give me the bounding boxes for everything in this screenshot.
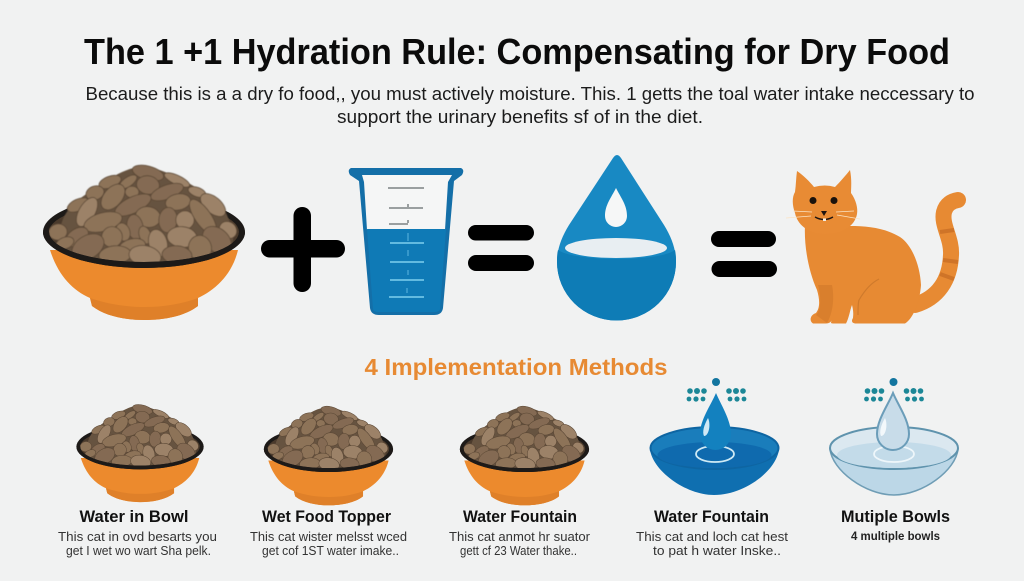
equals sign: [711, 231, 777, 277]
title: The 1 +1 Hydration Rule: Compensating for Dry Food: [84, 31, 950, 72]
description: gett cf 23 Water thake..: [460, 543, 577, 558]
intro text: support the urinary benefits sf of in the diet.: [337, 107, 703, 127]
icon: water drop: [557, 155, 676, 320]
label: Mutiple Bowls: [841, 508, 950, 526]
description: [250, 529, 407, 558]
equation: dry food + water = hydration = healthy cat: [43, 155, 958, 324]
icon: orange cat: [786, 170, 958, 324]
method: wet food topper: [250, 404, 407, 558]
description: [636, 529, 788, 558]
description: [58, 529, 217, 558]
description: This cat and loch cat hest: [636, 529, 788, 544]
method: multiple bowls: [830, 378, 958, 543]
description: 4 multiple bowls: [851, 529, 940, 543]
description: This cat in ovd besarts you: [58, 529, 217, 544]
icon: pale water bowl: [830, 378, 958, 495]
label: Water in Bowl: [80, 508, 188, 526]
method: water fountain (blue bowl): [636, 378, 788, 558]
description: This cat anmot hr suator: [449, 529, 591, 544]
icon: kibble bowl: [76, 403, 204, 502]
icon: measuring beaker: [349, 168, 463, 315]
intro text: Because this is a a dry fo food,, you must actively moisture. This. 1 getts the toal water intake neccessary to: [86, 84, 975, 104]
label: Water Fountain: [654, 508, 769, 526]
label: Water Fountain: [463, 508, 577, 526]
icon: kibble bowl: [460, 404, 589, 505]
description: to pat h water Inske..: [653, 543, 781, 558]
plus sign: [261, 207, 345, 292]
method: water in bowl: [58, 403, 217, 558]
intro text: [86, 84, 975, 127]
method: water fountain (kibble bowl): [449, 404, 591, 558]
section heading: 4 Implementation Methods: [364, 354, 668, 380]
icon: large kibble bowl: [43, 162, 245, 320]
description: get cof 1ST water imake..: [262, 543, 399, 558]
label: Wet Food Topper: [262, 508, 392, 526]
icon: kibble bowl: [264, 404, 393, 505]
description: get I wet wo wart Sha pelk.: [66, 543, 211, 558]
equals sign: [468, 225, 534, 271]
icon: blue fountain bowl: [650, 378, 779, 495]
description: [449, 529, 591, 558]
description: This cat wister melsst wced: [250, 529, 407, 544]
